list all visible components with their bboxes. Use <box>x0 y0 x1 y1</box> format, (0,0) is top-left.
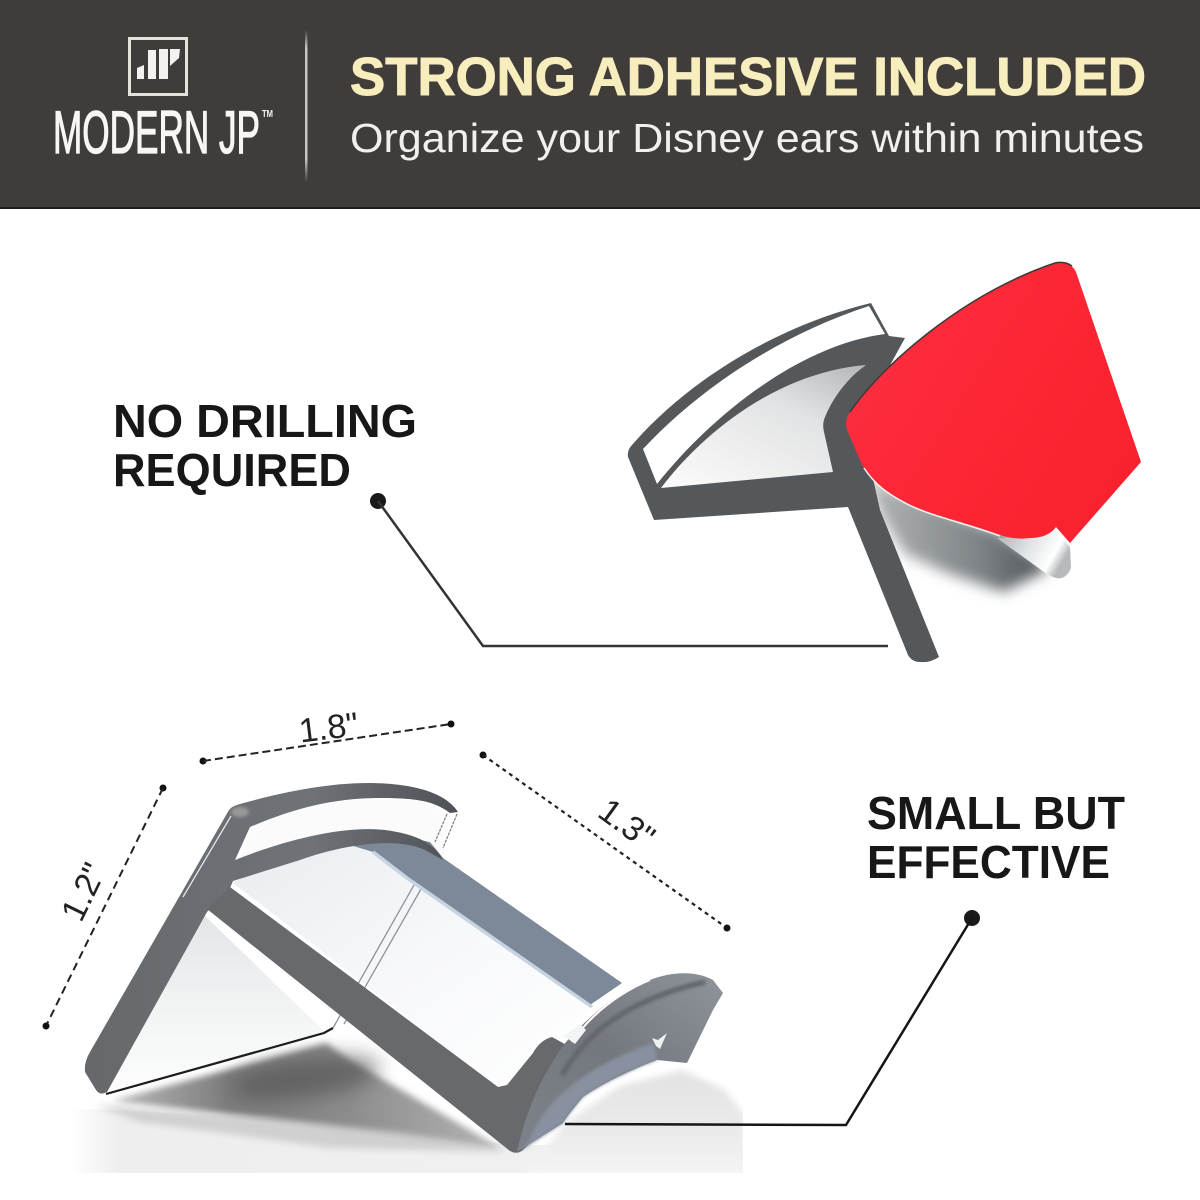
dimension: 1.3 inch: 1.3" <box>591 791 662 857</box>
inner window <box>661 365 866 488</box>
back rail highlight <box>373 852 592 1007</box>
clear front triangle panel <box>106 913 326 1094</box>
bracket frame <box>628 303 939 662</box>
dimension: 1.8 inch <box>200 706 454 764</box>
end piece top highlight <box>572 980 650 1042</box>
end piece slot <box>652 1033 667 1049</box>
icon: logo square <box>130 38 186 94</box>
end piece ridge <box>562 982 705 1075</box>
heading: no drilling required <box>113 395 417 496</box>
heading: no drilling required: NO DRILLING <box>113 395 417 447</box>
header band <box>0 0 1200 209</box>
product shadow: under panel <box>112 1043 504 1150</box>
glass clip highlight <box>564 1024 586 1044</box>
left bar edge highlight <box>183 816 231 897</box>
title: STRONG ADHESIVE INCLUDED <box>350 47 1146 107</box>
dimension: 1.3 inch <box>480 752 730 932</box>
callout line: small but effective <box>565 910 980 1125</box>
dimension: 1.8 inch: 1.8" <box>297 706 360 751</box>
callout line: no drilling <box>370 493 888 646</box>
curved end piece <box>517 973 723 1152</box>
red pad lower highlight <box>864 468 1000 536</box>
back rail <box>350 836 622 1005</box>
subtitle: Organize your Disney ears within minutes <box>350 115 1144 161</box>
front rail <box>207 887 572 1153</box>
left bar and arches <box>85 783 458 1094</box>
heading: small but effective <box>867 787 1125 888</box>
end piece blue band <box>520 1043 657 1151</box>
heading: small but effective: SMALL BUT <box>867 787 1125 839</box>
header divider <box>305 30 308 182</box>
clear upper band <box>643 306 885 484</box>
product: bracket with dimensions <box>85 783 723 1153</box>
clear back panel <box>240 800 450 860</box>
trademark mark: TM <box>262 109 273 120</box>
logo: Modern JP <box>53 38 273 166</box>
peeled sticker curl <box>997 527 1071 578</box>
triangle panel lower edge <box>106 1028 333 1094</box>
adhesive backing shadow <box>866 478 1050 592</box>
clear base panel <box>233 845 590 1087</box>
back panel edge <box>435 814 457 848</box>
glass fold line <box>333 885 421 1028</box>
logo wordmark: MODERN JP <box>53 99 260 166</box>
product shadow: floor <box>70 1070 745 1180</box>
heading: no drilling required: REQUIRED <box>113 444 351 496</box>
red pad upper edge <box>850 262 1072 412</box>
heading: small but effective: EFFECTIVE <box>867 836 1110 888</box>
dimension: 1.2 inch <box>42 784 166 1030</box>
red adhesive pad <box>846 262 1141 543</box>
product: bracket with adhesive peeled <box>628 262 1141 662</box>
dimension: 1.2 inch: 1.2" <box>54 857 114 927</box>
arch corner highlight <box>231 807 249 817</box>
